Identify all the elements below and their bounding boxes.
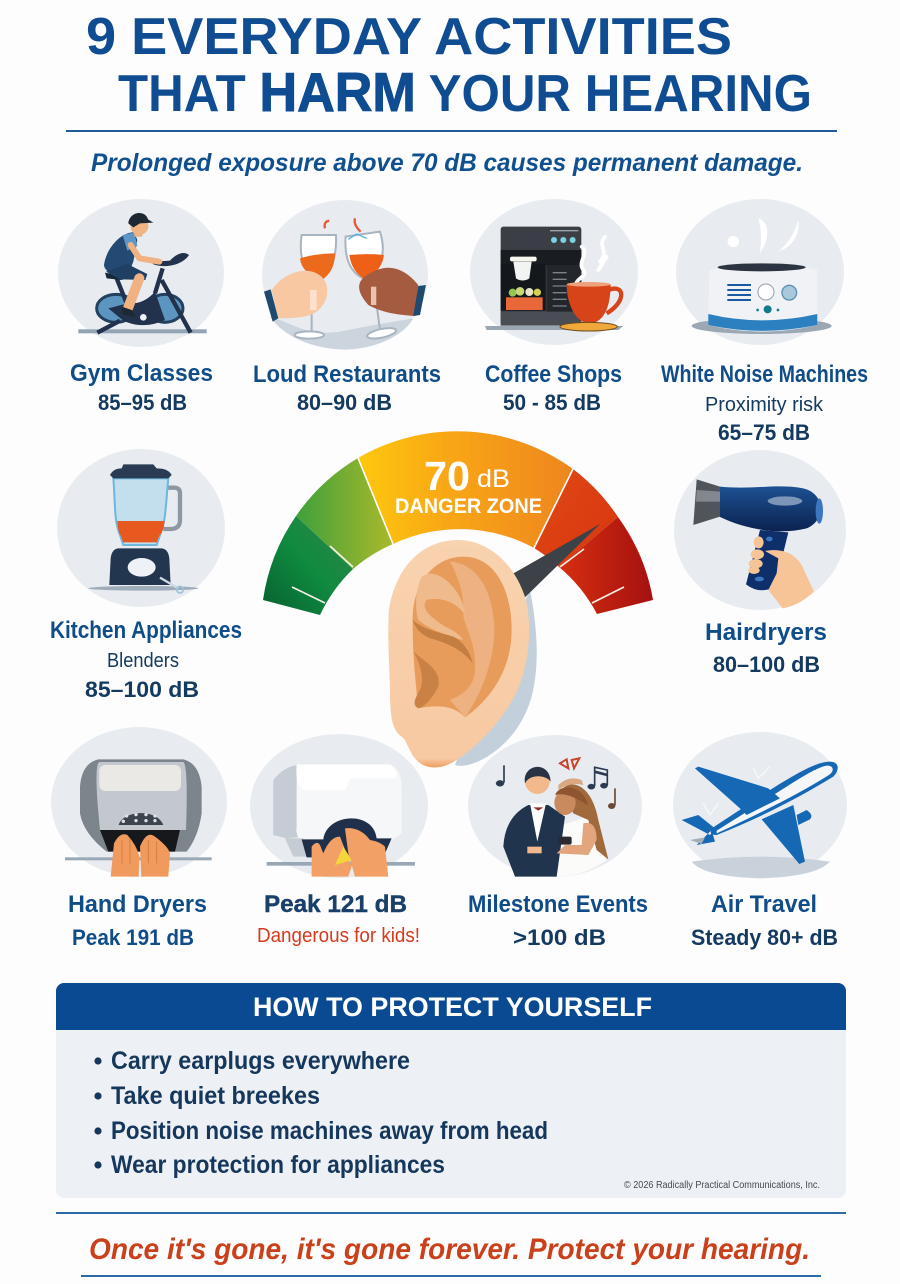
icon: hairdryer in hand: [693, 479, 823, 608]
gauge value: [395, 453, 542, 518]
label: Blenders: [107, 650, 179, 672]
subtitle: Prolonged exposure above 70 dB causes permanent damage.: [91, 149, 803, 177]
label: Kitchen Appliances: [50, 617, 242, 644]
panel header: HOW TO PROTECT YOURSELF: [253, 992, 652, 1022]
label: [253, 361, 441, 415]
needle: [500, 524, 600, 612]
protection tips list: Wear protection for appliances: [111, 1151, 445, 1179]
label: Proximity risk: [705, 394, 824, 416]
protection tips list: Carry earplugs everywhere: [111, 1047, 410, 1075]
panel header: [56, 983, 846, 1030]
label: Dangerous for kids!: [257, 925, 420, 947]
label: [691, 891, 838, 950]
ear: [388, 540, 529, 768]
copyright: © 2026 Radically Practical Communications, Inc.: [624, 1180, 820, 1191]
icon: airplane: [682, 762, 838, 878]
gauge value: DANGER ZONE: [395, 495, 542, 518]
label: Hairdryers: [705, 619, 827, 646]
label: [50, 617, 242, 702]
label: [257, 891, 420, 947]
icon: white hand dryer: [267, 764, 415, 877]
protection tips list: Take quiet breekes: [111, 1082, 320, 1110]
item: white noise machines: [661, 199, 868, 445]
icon: white noise machine: [692, 218, 832, 334]
label: Air Travel: [711, 891, 817, 918]
icon: exercise bike rider: [78, 213, 207, 333]
label: [70, 360, 213, 415]
item: coffee shops: [470, 199, 638, 415]
gauge with ear: [263, 431, 653, 768]
item: hairdryers: [674, 450, 846, 677]
label: [485, 361, 622, 415]
label: 65–75 dB: [718, 420, 810, 445]
icon: blender: [88, 464, 198, 593]
protection tips list: [94, 1047, 548, 1179]
protection tips list: Position noise machines away from head: [111, 1117, 548, 1145]
label: Peak 121 dB: [264, 891, 407, 918]
icon: espresso machine and cup: [485, 227, 623, 331]
label: Gym Classes: [70, 360, 213, 387]
item: gym classes: [58, 199, 224, 415]
gauge value: 70: [424, 453, 470, 499]
item: hand dryers: [51, 727, 227, 950]
title: [86, 8, 812, 123]
label: [661, 361, 868, 445]
label: 85–100 dB: [85, 677, 199, 702]
item: loud restaurants: [253, 200, 441, 415]
label: Loud Restaurants: [253, 361, 441, 388]
ear shadow: [455, 590, 537, 766]
label: [68, 891, 207, 950]
panel: how to protect yourself: [56, 983, 846, 1198]
closing tagline: Once it's gone, it's gone forever. Protect your hearing.: [89, 1233, 810, 1266]
title: THAT HARM YOUR HEARING: [118, 61, 812, 123]
label: >100 dB: [513, 925, 606, 950]
label: [705, 619, 827, 677]
label: Coffee Shops: [485, 361, 622, 388]
label: 80–100 dB: [713, 652, 820, 677]
label: 80–90 dB: [297, 390, 392, 415]
item: milestone events: [468, 735, 648, 950]
label: Hand Dryers: [68, 891, 207, 918]
icon: wedding couple: [496, 758, 615, 877]
title: 9 EVERYDAY ACTIVITIES: [86, 8, 732, 66]
gauge arc: [263, 431, 653, 615]
item: air travel: [673, 732, 847, 950]
icon: clinking wine glasses: [264, 218, 426, 349]
label: 50 - 85 dB: [503, 390, 601, 415]
label: 85–95 dB: [98, 390, 187, 415]
icon: hand dryer: [65, 759, 212, 877]
gauge value: dB: [477, 465, 510, 493]
label: Peak 191 dB: [72, 925, 194, 950]
item: kitchen appliances: [50, 449, 242, 702]
label: Steady 80+ dB: [691, 925, 838, 950]
label: [468, 891, 648, 950]
label: Milestone Events: [468, 891, 648, 918]
item: hand dryers for kids: [250, 734, 428, 947]
